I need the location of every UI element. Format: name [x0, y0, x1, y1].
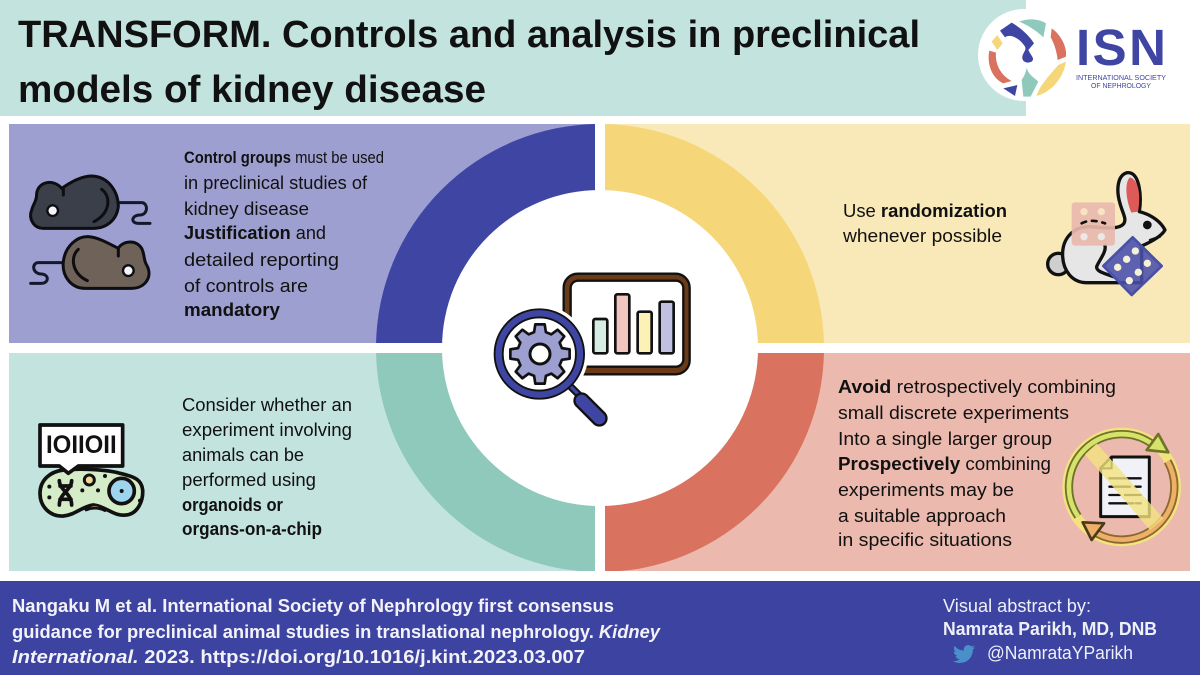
icon: organ chip with binary: [40, 425, 143, 516]
text: combining experiments: in specific situations: [838, 530, 1012, 550]
icon: magnifier over bar chart: [490, 274, 690, 418]
text: organoids: animals can be: [182, 445, 304, 465]
title: [18, 14, 920, 111]
icon: twitter bird: [953, 645, 975, 663]
icon: crossed-out recycling document: [1067, 433, 1176, 541]
text: combining experiments: Into a single larger group: [838, 429, 1052, 449]
ISN logo: [978, 9, 1166, 101]
ISN logo: OF NEPHROLOGY: [1091, 81, 1151, 90]
citation: [12, 596, 661, 667]
ISN logo: INTERNATIONAL SOCIETY: [1076, 73, 1166, 82]
citation: guidance for preclinical animal studies in translational nephrology. Kidney: [12, 622, 661, 642]
text: control groups: Control groups must be used: [184, 148, 384, 167]
text: organoids: organoids or: [182, 495, 283, 515]
text: combining experiments: a suitable approach: [838, 506, 1006, 526]
citation: Nangaku M et al. International Society of Nephrology first consensus: [12, 596, 614, 616]
text: control groups: kidney disease: [184, 199, 309, 219]
text: combining experiments: Avoid retrospectively combining: [838, 377, 1116, 397]
credit: Namrata Parikh, MD, DNB: [943, 619, 1157, 639]
text: organoids: performed using: [182, 470, 316, 490]
text: organoids: [182, 395, 352, 539]
text: combining experiments: [838, 377, 1116, 550]
icon: organ chip with binary: IOIIOII: [46, 431, 117, 459]
text: control groups: in preclinical studies of: [184, 173, 368, 193]
text: organoids: Consider whether an: [182, 395, 352, 415]
text: combining experiments: Prospectively combining: [838, 454, 1051, 474]
text: randomization: Use randomization: [843, 201, 1007, 221]
text: organoids: organs-on-a-chip: [182, 519, 322, 539]
credit: Visual abstract by:: [943, 596, 1091, 616]
text: control groups: detailed reporting: [184, 250, 339, 270]
credit: [943, 596, 1157, 663]
panel: randomization: [605, 124, 1190, 343]
text: control groups: of controls are: [184, 276, 308, 296]
text: randomization: whenever possible: [842, 226, 1002, 246]
panel: control groups: [9, 124, 595, 343]
ISN logo: ISN: [1076, 19, 1166, 76]
icon: two mice: [31, 176, 150, 288]
panel: organoids: [9, 353, 595, 571]
text: combining experiments: small discrete experiments: [838, 403, 1069, 423]
text: randomization: [842, 201, 1007, 246]
text: organoids: experiment involving: [182, 420, 352, 440]
citation: International. 2023. https://doi.org/10.1016/j.kint.2023.03.007: [12, 647, 585, 667]
title: models of kidney disease: [18, 69, 486, 111]
header band: [0, 0, 1026, 116]
title: TRANSFORM. Controls and analysis in preclinical: [18, 14, 920, 56]
panel: combining experiments: [605, 353, 1190, 571]
credit: @NamrataYParikh: [987, 643, 1133, 663]
icon: rabbit with dice: [1048, 173, 1165, 295]
footer band: [0, 581, 1200, 675]
text: control groups: mandatory: [184, 300, 280, 320]
text: control groups: Justification and: [184, 223, 326, 243]
text: control groups: [184, 148, 384, 320]
text: combining experiments: experiments may be: [838, 480, 1014, 500]
central white circle: [442, 190, 758, 506]
